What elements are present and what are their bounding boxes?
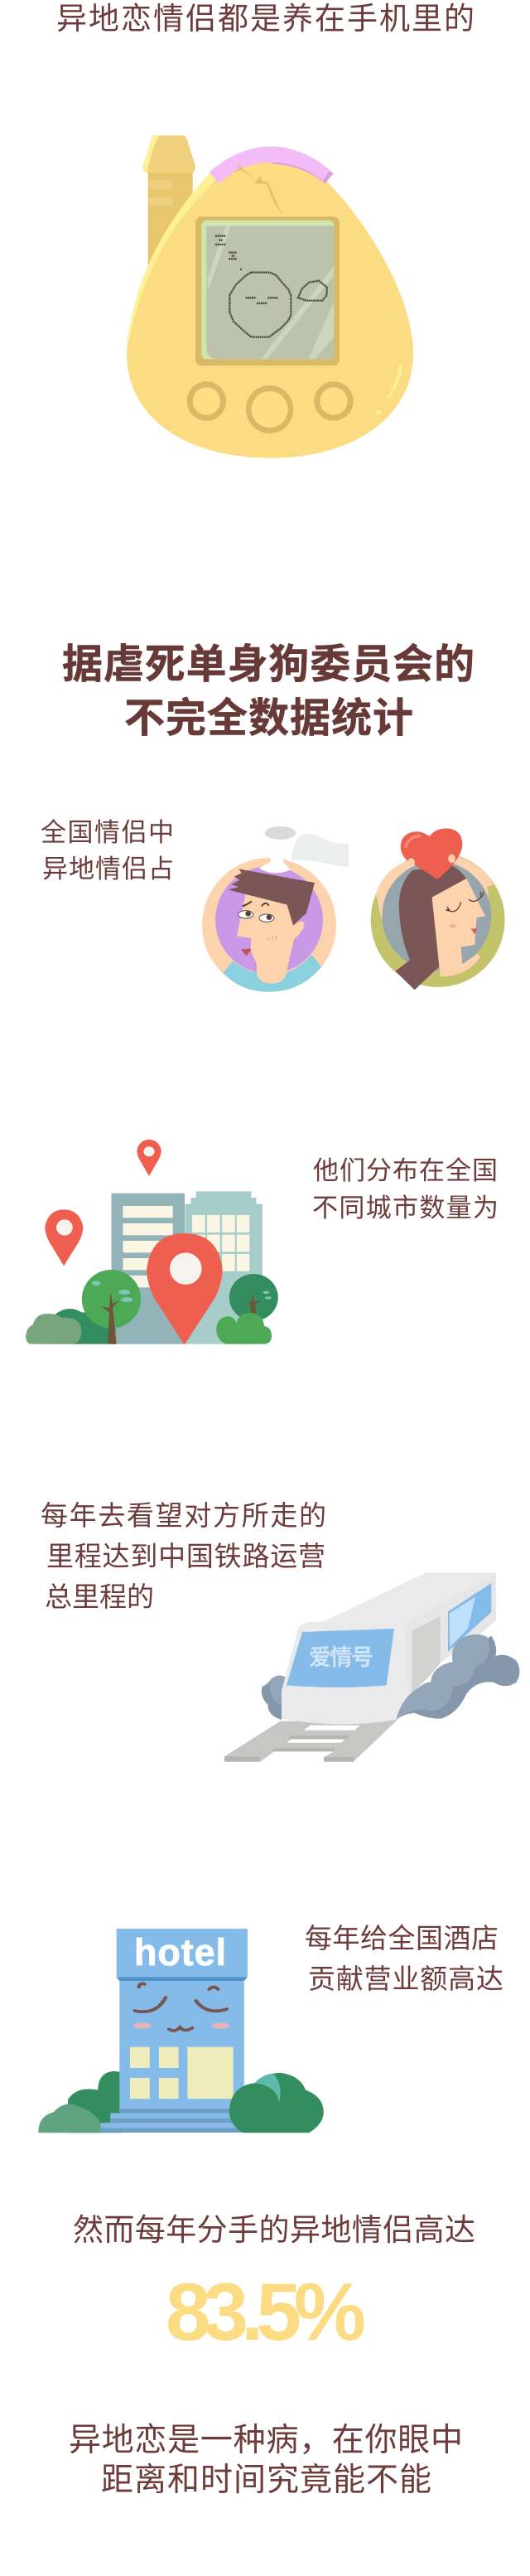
face [237, 893, 304, 984]
screen frame [195, 216, 340, 366]
medium pin left [45, 1209, 83, 1266]
icon: smiling hotel [38, 1929, 324, 2133]
text: couples share: 全国情侣中 [41, 818, 174, 847]
text: railway: 总里程的 [45, 1581, 154, 1612]
pixel pet [215, 236, 327, 337]
text: couples share: 异地情侣占 [42, 855, 174, 884]
text: breakup intro: 然而每年分手的异地情侣高达 [73, 2213, 475, 2247]
arms [376, 855, 494, 920]
face [432, 879, 485, 976]
face [135, 1983, 227, 2031]
text: hotel revenue: 每年给全国酒店 [305, 1923, 499, 1954]
text: cities: 不同城市数量为 [312, 1194, 499, 1223]
closing text: 距离和时间究竟能不能 [101, 2462, 431, 2498]
right smoke [396, 1634, 519, 1720]
arms [202, 858, 336, 992]
heading: 据虐死单身狗委员会的 [62, 642, 475, 687]
hair [228, 869, 315, 926]
building [119, 1975, 244, 2114]
eyes [446, 892, 484, 912]
train sign text: 爱情号 [309, 1645, 373, 1670]
back bushes [55, 1309, 115, 1344]
gloss [388, 364, 401, 399]
right bush [229, 2073, 324, 2133]
icon: man with white flag [202, 826, 349, 992]
windscreen [287, 1629, 394, 1687]
flag pole [259, 854, 291, 873]
small pin top [137, 1140, 161, 1176]
text: railway: 里程达到中国铁路运营 [46, 1541, 325, 1571]
closing text: 异地恋是一种病，在你眼中 [69, 2423, 463, 2458]
left tree [82, 1270, 141, 1344]
heading [62, 642, 475, 741]
left bush [38, 2104, 100, 2133]
large pin [147, 1233, 223, 1345]
heading: 不完全数据统计 [124, 696, 413, 741]
hands [407, 858, 415, 867]
text: hotel revenue [305, 1923, 504, 1994]
icon: woman with heart [371, 828, 505, 990]
left smoke [262, 1675, 285, 1720]
lips [242, 948, 251, 956]
text: railway [41, 1500, 326, 1612]
text: cities: 他们分布在全国 [313, 1156, 498, 1185]
text: railway: 每年去看望对方所走的 [41, 1500, 326, 1531]
heart [401, 828, 462, 879]
flag [292, 834, 349, 867]
right tree [229, 1274, 278, 1321]
egg body [127, 147, 413, 458]
side window [448, 1583, 491, 1652]
icon: yellow virtual pet egg [127, 135, 413, 458]
steps [119, 2109, 244, 2114]
text: cities [312, 1156, 499, 1223]
buildings [111, 1191, 263, 1344]
windows [130, 2047, 234, 2099]
big number: 83.5% [166, 2266, 366, 2357]
buttons [187, 381, 354, 433]
shirt [223, 955, 321, 992]
back bushes [68, 2071, 123, 2133]
icon: city with map pins [26, 1140, 278, 1345]
right bush [216, 1313, 272, 1344]
egg left highlight [127, 172, 217, 354]
hotel sign text: hotel [134, 1931, 226, 1973]
eyes [238, 911, 253, 918]
crack [232, 162, 283, 216]
track [224, 1720, 398, 1762]
text: hotel revenue: 贡献营业额高达 [308, 1963, 504, 1994]
left bush [26, 1314, 81, 1344]
door [412, 1616, 441, 1693]
antenna [143, 135, 195, 265]
screen [201, 220, 334, 359]
closing text [69, 2423, 463, 2498]
text: couples share [41, 818, 174, 884]
background circle [215, 866, 323, 974]
train body [282, 1572, 496, 1724]
pink band [210, 147, 334, 183]
icon: love train [224, 1572, 519, 1762]
hair [395, 864, 466, 990]
top line text: 异地恋情侣都是养在手机里的 [56, 2, 475, 36]
